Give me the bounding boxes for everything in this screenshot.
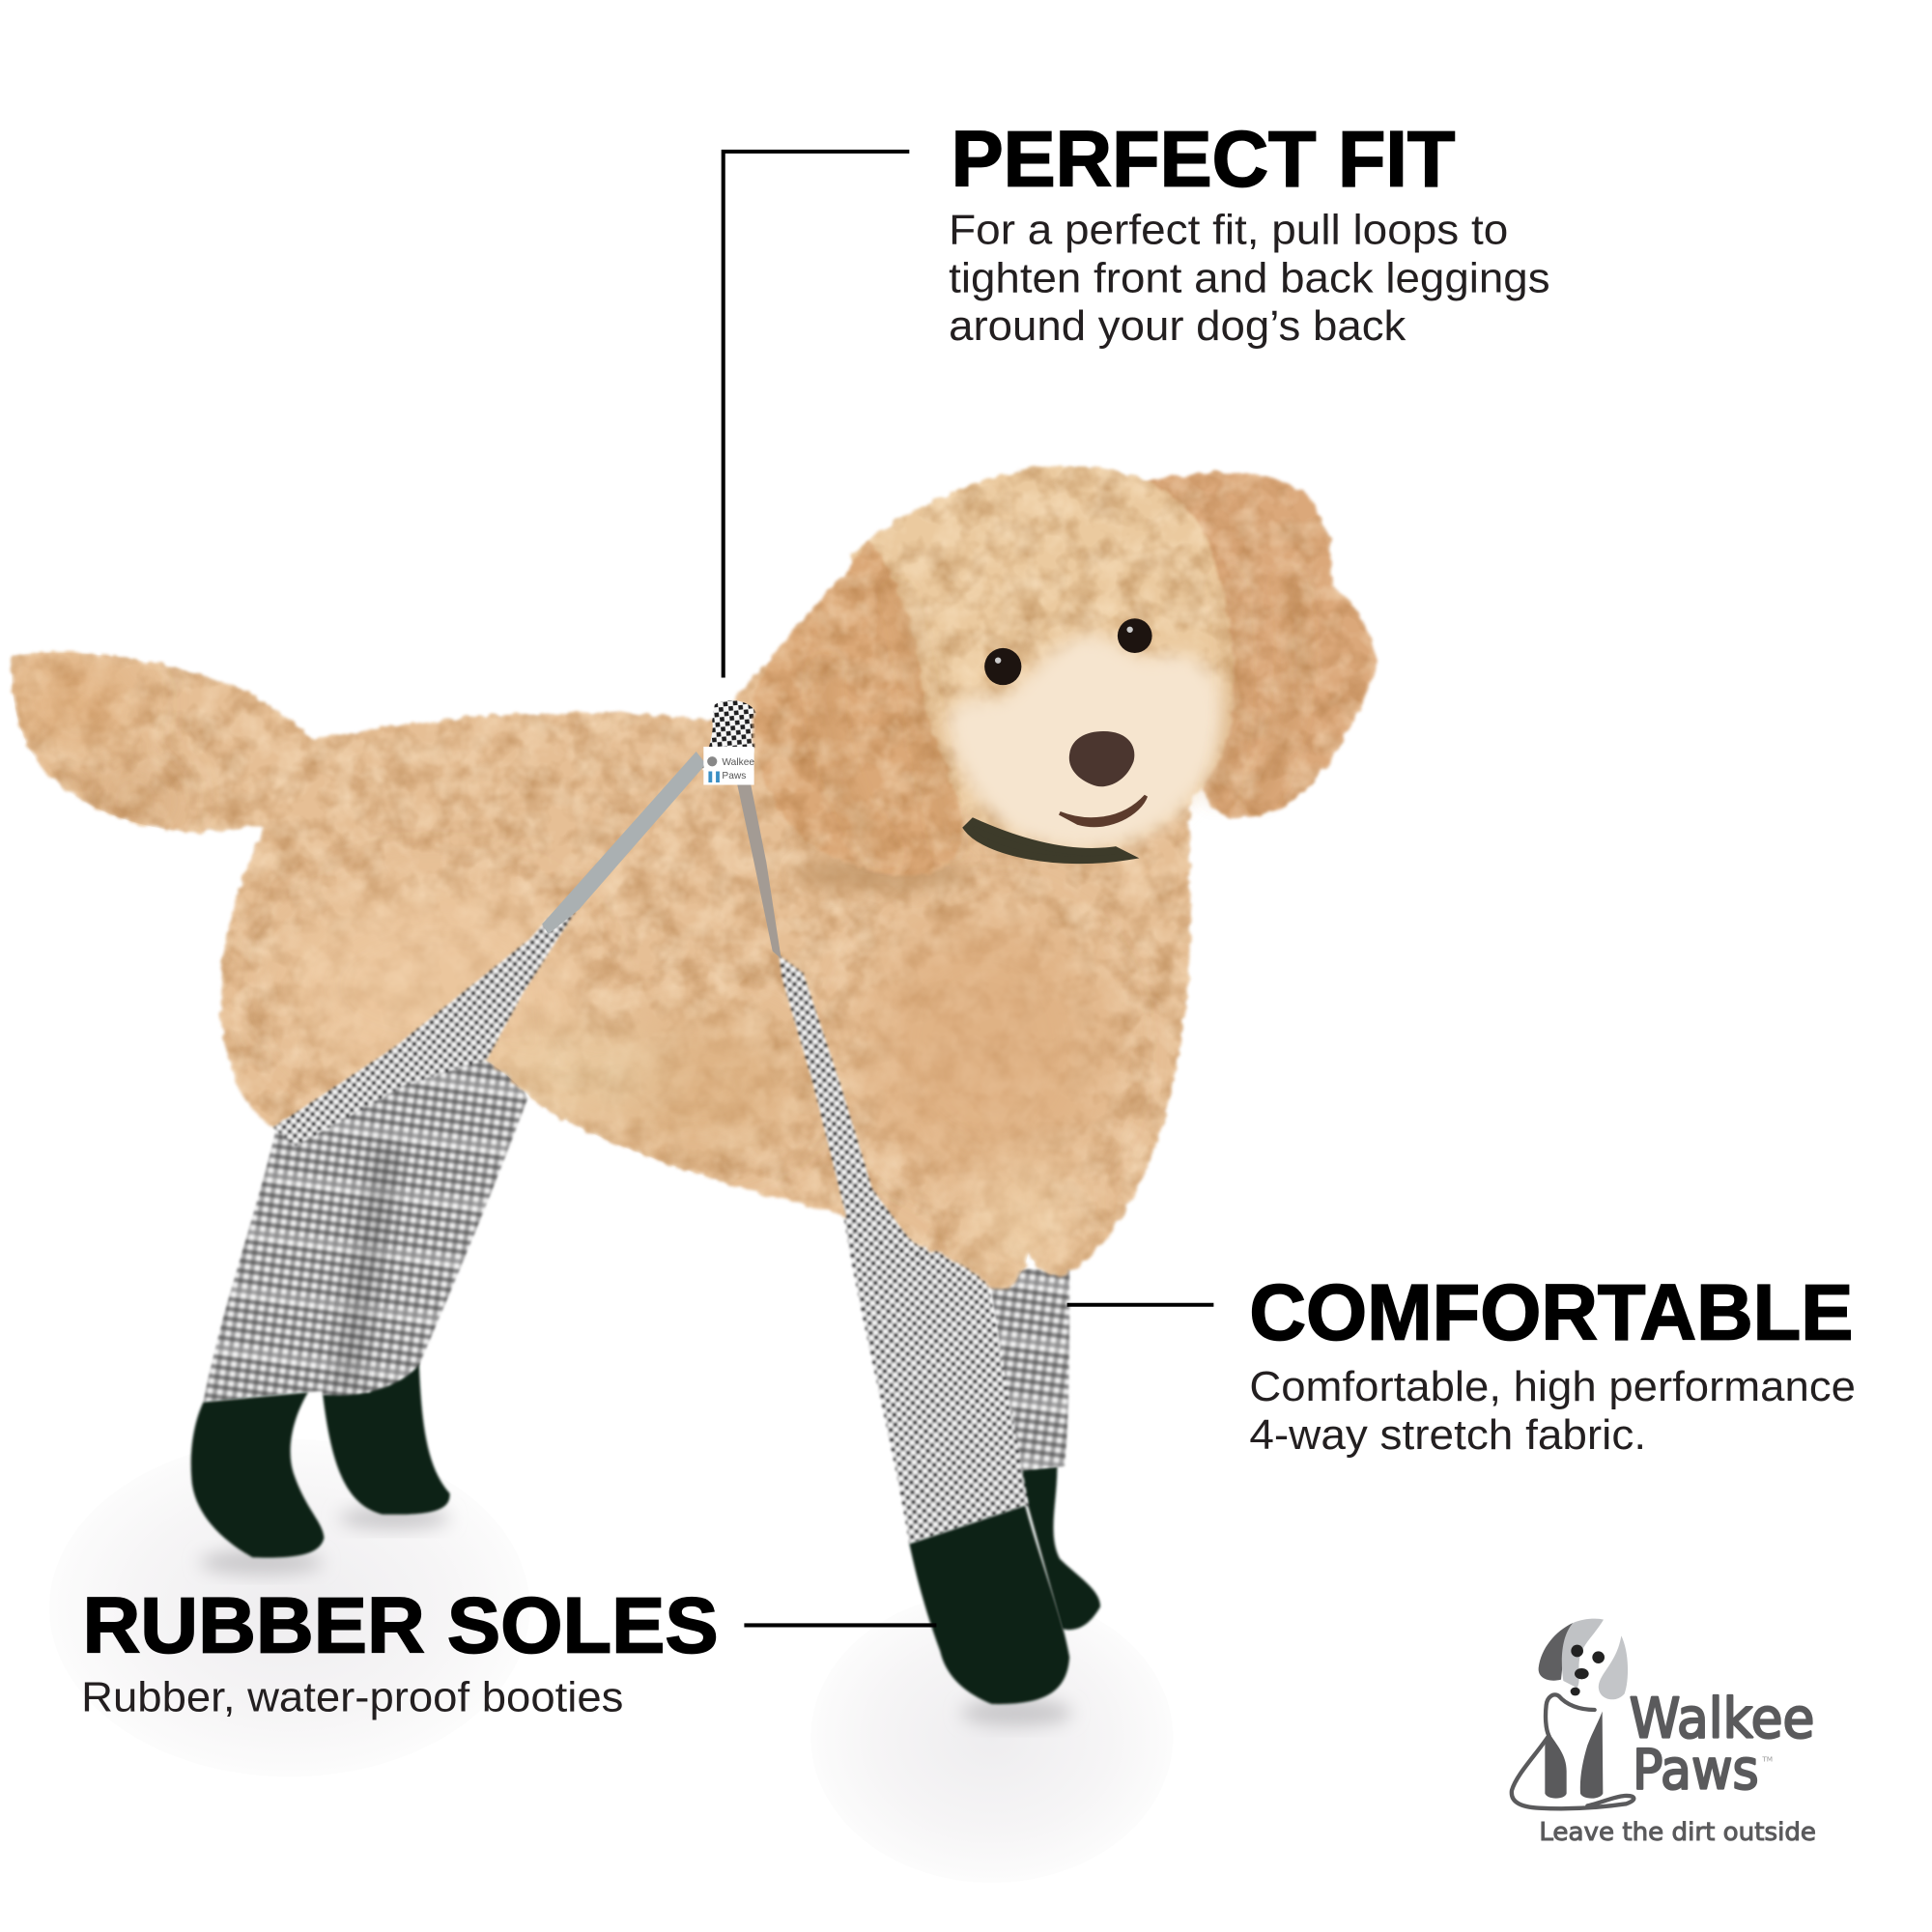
logo tagline: Leave the dirt outside: [1539, 1818, 1816, 1847]
fur shading: [13, 666, 1109, 1282]
heading: perfect fit: PERFECT FIT: [952, 116, 1455, 204]
rear legging fold shading: [345, 1146, 388, 1386]
shadow: front paws: [810, 1592, 1173, 1883]
description: perfect fit: tighten front and back leggings: [949, 255, 1550, 301]
tie knot: [702, 700, 757, 770]
body fur: [12, 616, 1190, 1290]
description: perfect fit: around your dog’s back: [949, 303, 1406, 350]
description: comfortable: Comfortable, high performance: [1249, 1364, 1856, 1410]
near front boot: [909, 1506, 1069, 1704]
logo wordmark: Paws: [1633, 1739, 1759, 1803]
muzzle and face: [947, 634, 1223, 850]
far front legging: [988, 1269, 1069, 1471]
logo: Walkee Paws: [1512, 1619, 1816, 1847]
heading: rubber soles: RUBBER SOLES: [82, 1581, 719, 1669]
logo wordmark: [1630, 1687, 1814, 1803]
logo dog icon: [1512, 1619, 1634, 1808]
logo wordmark: Walkee: [1630, 1687, 1814, 1750]
rear strap: [273, 906, 579, 1146]
callout: rubber soles text: [81, 1581, 719, 1721]
brand tag: [703, 747, 754, 784]
contact shadow: front paw: [961, 1699, 1072, 1726]
right eye: [1118, 618, 1152, 653]
dog wearing leggings: [12, 466, 1377, 1704]
description: rubber soles: Rubber, water-proof booties: [81, 1675, 623, 1721]
callout: perfect fit text: [949, 116, 1550, 350]
brand tag: Paws: [722, 771, 746, 781]
callout: perfect fit leader line: [724, 152, 909, 678]
shadow under left ear: [795, 853, 967, 892]
brand tag: Walkee: [722, 757, 754, 768]
left ear: [753, 540, 961, 875]
head: [850, 466, 1234, 855]
callout: comfortable leader line: [1067, 1303, 1213, 1306]
far rear boot: [323, 1361, 450, 1515]
front strap upper band: [737, 782, 781, 958]
front strap: [779, 955, 924, 1260]
near rear boot: [191, 1392, 324, 1557]
callout: rubber soles leader line: [744, 1624, 936, 1627]
far rear legging: [296, 1041, 527, 1396]
mouth: [1060, 796, 1146, 825]
description: comfortable: 4-way stretch fabric.: [1249, 1412, 1646, 1459]
near front legging: [841, 1202, 1029, 1544]
rear strap upper band: [542, 752, 706, 934]
contact shadow: near rear paw: [200, 1550, 323, 1575]
description: perfect fit: [949, 208, 1550, 350]
description: comfortable: [1249, 1364, 1856, 1459]
nose: [1069, 731, 1134, 786]
far front boot: [1018, 1466, 1100, 1630]
heading: comfortable: COMFORTABLE: [1249, 1268, 1853, 1356]
ear shading: [825, 579, 1296, 856]
left eye: [984, 648, 1021, 685]
right ear: [1140, 472, 1377, 817]
logo wordmark: TM: [1761, 1754, 1773, 1763]
near rear legging: [203, 1047, 425, 1403]
shadow: rear paws: [49, 1439, 529, 1776]
collar: [967, 822, 1127, 860]
callout: comfortable text: [1249, 1268, 1856, 1459]
description: perfect fit: For a perfect fit, pull loops to: [949, 208, 1508, 254]
contact shadow: far rear paw: [339, 1507, 450, 1529]
